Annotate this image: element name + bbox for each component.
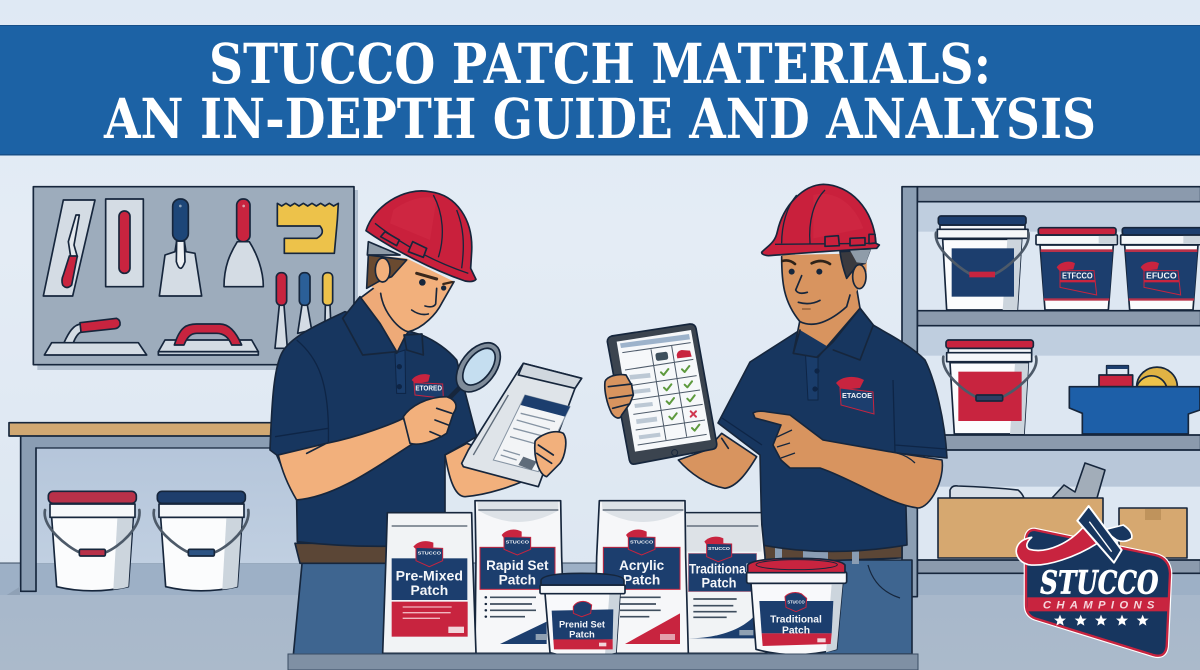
shirt logo: ETORED	[415, 386, 442, 393]
logo wordmark: STUCCO	[1040, 565, 1159, 601]
bag: acrylic patch: Patch	[623, 571, 660, 587]
bag logo	[704, 537, 732, 562]
bag: traditional patch: Traditional	[689, 560, 749, 576]
magnifying glass	[447, 335, 509, 400]
bag: rapid set patch	[475, 501, 565, 653]
bag: pre-mixed patch	[383, 513, 476, 653]
hard hat	[366, 191, 476, 282]
polo shirt	[718, 308, 947, 552]
polo shirt	[270, 312, 477, 546]
floor	[0, 563, 1200, 670]
tub: premixed set patch: Patch	[569, 630, 595, 640]
shirt logo: ETACOE	[842, 391, 872, 400]
logo subtitle: CHAMPIONS	[1043, 600, 1155, 612]
shelf frame	[902, 187, 1200, 597]
tub logo: STUCCO	[787, 599, 805, 605]
bucket: branded navy lid	[1121, 228, 1200, 310]
bag logo: STUCCO	[506, 539, 529, 545]
worker right comparing on tablet	[605, 184, 947, 654]
tool: float	[158, 324, 258, 355]
tool: red scraper	[224, 199, 263, 287]
tool: margin trowel	[44, 318, 147, 355]
bag logo: STUCCO	[630, 539, 653, 545]
shelf bays	[917, 187, 1200, 595]
bucket logo: EFUCO	[1146, 271, 1177, 280]
trowel	[1077, 506, 1132, 563]
tub: premixed set patch: Prenid Set	[559, 620, 605, 630]
bag logo: STUCCO	[708, 546, 730, 552]
worker left inspecting a bag	[270, 191, 582, 655]
tool: small scrapers	[275, 273, 333, 348]
pegboard with tools	[33, 187, 358, 370]
bag logo	[413, 541, 443, 567]
shirt logo	[412, 374, 443, 398]
title banner	[0, 25, 1200, 156]
bucket: red label	[943, 340, 1036, 434]
hand with magnifier	[403, 397, 456, 444]
bag: pre-mixed patch: Patch	[410, 582, 448, 598]
hard hat	[762, 184, 879, 256]
forearm holding bag	[445, 443, 537, 497]
tub: traditional patch: Traditional	[770, 615, 822, 626]
cardboard boxes and tools on bottom shelf	[938, 463, 1187, 558]
display table	[288, 654, 918, 670]
badge shape	[1026, 530, 1170, 656]
tub logo	[573, 601, 592, 617]
forearm holding magnifier	[278, 418, 413, 500]
logo stars	[1054, 615, 1149, 626]
title line 1: STUCCO PATCH MATERIALS:	[209, 31, 991, 96]
inspected material bag	[462, 363, 582, 487]
bag: acrylic patch	[595, 501, 688, 653]
bag logo: STUCCO	[418, 551, 441, 557]
red band	[1027, 597, 1168, 611]
pants and belt	[764, 543, 912, 654]
pointing forearm and hand	[753, 411, 942, 508]
tub: traditional patch: Patch	[782, 625, 810, 636]
bag: rapid set patch: Patch	[499, 571, 536, 587]
neck and head	[782, 250, 873, 360]
tablet arm and hand	[678, 433, 757, 488]
tool: blue putty knife	[159, 199, 202, 296]
brand logo: Stucco Champions	[1016, 506, 1170, 656]
tub: traditional patch	[747, 558, 847, 655]
bucket: branded red lid	[1036, 228, 1117, 310]
bucket: navy lid	[154, 491, 249, 591]
tool: angled trowel	[43, 200, 95, 296]
tub: premixed set patch	[540, 573, 625, 657]
neck and head	[343, 242, 454, 355]
bucket: navy label	[936, 216, 1029, 310]
bag: traditional patch	[685, 513, 767, 653]
tool: yellow notched trowel	[277, 203, 338, 253]
bag: traditional patch: Patch	[701, 575, 736, 591]
product display	[383, 501, 847, 657]
bag: acrylic patch: Acrylic	[619, 557, 664, 573]
swoosh	[1016, 525, 1097, 565]
workbench	[7, 423, 303, 595]
tool: flat trowel	[106, 199, 143, 287]
shirt logo	[836, 377, 874, 414]
bag logo	[626, 529, 655, 555]
bucket logo: ETFCCO	[1062, 271, 1093, 280]
blue toolbox	[1069, 366, 1200, 434]
bag: rapid set patch: Rapid Set	[486, 557, 549, 573]
tablet comparison chart	[605, 324, 717, 464]
pants and belt	[293, 543, 447, 655]
bag: pre-mixed patch: Pre-Mixed	[396, 568, 463, 584]
bucket: red lid	[45, 491, 140, 591]
bag logo	[502, 529, 531, 555]
storage shelving	[902, 187, 1200, 597]
